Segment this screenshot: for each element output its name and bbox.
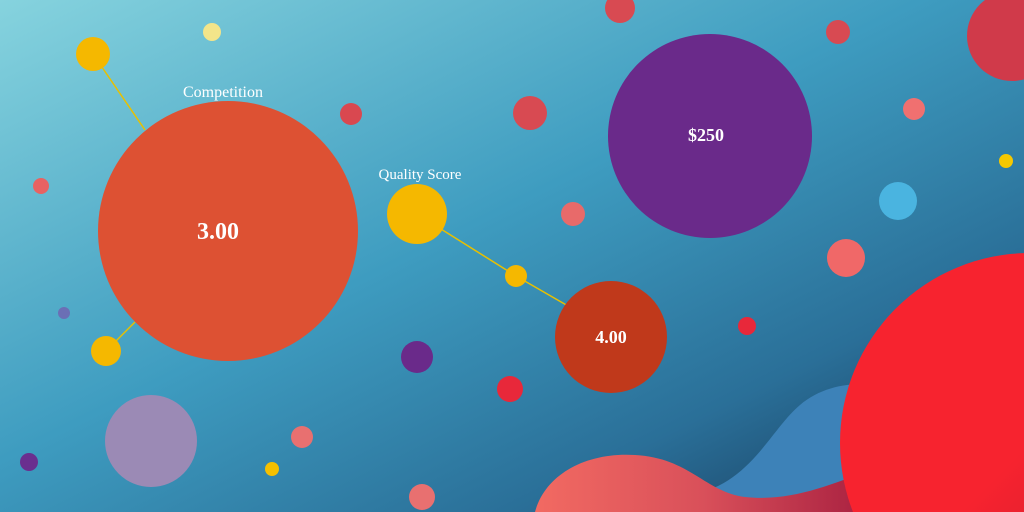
bubble: $250: $250 — [688, 125, 724, 145]
label: Quality Score: Quality Score — [379, 167, 462, 183]
yellow node quality score — [387, 184, 447, 244]
bubble: competition 3.00 — [98, 101, 358, 361]
label: Competition: Competition — [183, 84, 263, 101]
decorative wave: coral — [535, 455, 870, 512]
big red circle bottom right — [840, 253, 1024, 512]
red circle top right — [967, 0, 1024, 81]
bubble: $250 — [608, 34, 812, 238]
bubble: 4.00 — [555, 281, 667, 393]
bubble: 4.00: 4.00 — [595, 327, 627, 347]
decorative wave: blue — [690, 384, 870, 512]
yellow node bottom left — [91, 336, 121, 366]
connector lines — [93, 54, 575, 351]
yellow node top left — [76, 37, 110, 71]
yellow node middle — [505, 265, 527, 287]
bubble: competition 3.00: 3.00 — [197, 219, 239, 245]
